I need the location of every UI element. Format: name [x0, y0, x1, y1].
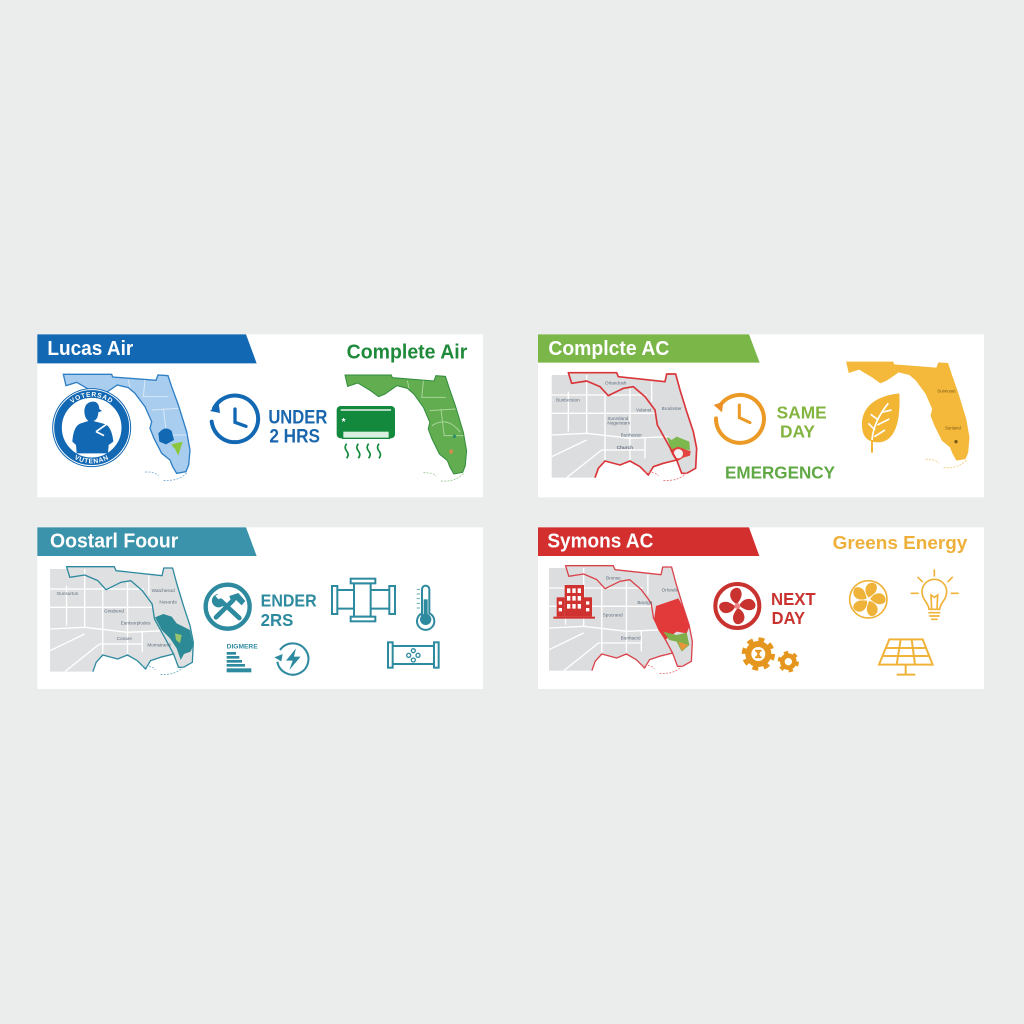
map: gray street map with red region: Bronse — [606, 575, 621, 580]
text: same day: DAY — [780, 422, 815, 442]
icon: stacked bars with caption — [227, 644, 258, 672]
map: gray street map with red outline: Orlandosh — [605, 380, 627, 385]
icon: wrench and hammer — [206, 585, 250, 629]
text: ender 2rs: 2RS — [261, 610, 293, 630]
map: gray street map with teal outline: Eantsorplodes — [121, 620, 151, 625]
map: gray street map with red outline: Bunberston — [556, 398, 580, 403]
text: ender 2rs: ENDER — [261, 591, 317, 611]
map: Florida yellow: Sunnoset — [937, 388, 956, 393]
map: gray street map with red outline: Church — [617, 445, 633, 450]
header banner: Symons AC: Symons AC — [547, 531, 653, 553]
icon: orange clock — [714, 395, 764, 443]
icon: leaf — [862, 393, 900, 453]
text: next day: NEXT — [771, 589, 816, 609]
panel: Complete AC — [538, 334, 984, 497]
icon: pipe fitting — [332, 579, 395, 621]
map: gray street map with teal outline: Watchesod — [152, 588, 175, 593]
icon: stacked bars with caption: DIGMERE — [227, 644, 258, 650]
icon: veteran badge: VOTERSAD — [70, 392, 112, 402]
panel: Symons AC — [538, 527, 984, 689]
icon: thermometer — [417, 586, 434, 630]
map: gray street map with red region: Bunhacrd — [621, 635, 641, 640]
map: gray street map with teal outline: Ginsbend — [104, 608, 124, 613]
map: gray street map with teal outline: Conare — [117, 636, 132, 641]
icon: building — [553, 585, 595, 619]
label: Complete Air: Complete Air — [347, 341, 468, 363]
icon: energy circle — [274, 643, 308, 675]
map: gray street map with red region: Orlonds — [662, 587, 679, 592]
text: emergency: EMERGENCY — [725, 462, 835, 482]
header banner: Oostarl Foour: Oostarl Foour — [50, 531, 179, 553]
icon: light bulb — [911, 570, 958, 619]
map: gray street map with red outline — [552, 373, 697, 480]
map: Florida light blue — [63, 374, 190, 480]
icon: gears — [744, 640, 797, 670]
map: gray street map with red region — [549, 566, 692, 673]
map: gray street map with red outline: Sunrsland — [607, 416, 629, 421]
header banner: Symons AC — [538, 527, 759, 556]
text: next day — [771, 589, 816, 628]
map: gray street map with teal outline — [50, 567, 193, 674]
header banner: Lucas Air — [37, 334, 257, 363]
icon: air conditioner — [337, 406, 395, 458]
map: Florida green — [345, 375, 467, 481]
text: response time: UNDER — [268, 407, 327, 428]
header banner: Complete AC: Complcte AC — [548, 338, 669, 360]
map: gray street map with red outline: Nogerstam — [607, 420, 630, 425]
map: gray street map with red outline: Brodnster — [662, 406, 682, 411]
icon: air conditioner: * — [342, 417, 346, 428]
icon: red fan — [715, 584, 759, 628]
map: gray street map with teal outline: Ounsurton — [57, 591, 79, 596]
icon: clock — [210, 396, 258, 442]
icon: inline valve — [388, 642, 439, 668]
icon: solar panel — [879, 639, 933, 675]
icon: veteran badge: VUTENAN — [76, 454, 108, 464]
map: gray street map with red outline: Volanst — [636, 408, 652, 413]
map: gray street map with teal outline: Nosorde — [159, 599, 177, 604]
text: response time: 2 HRS — [269, 426, 320, 447]
icon: orange fan — [850, 581, 887, 618]
text: next day: DAY — [772, 608, 805, 628]
map: gray street map with teal outline: Momstrand — [147, 643, 171, 648]
map: Florida yellow: Sunland — [945, 426, 961, 431]
panel: Oostarl Foour — [37, 527, 483, 689]
map: gray street map with red region: Bourge — [637, 600, 653, 605]
text: same day — [777, 402, 827, 442]
header banner: Oostarl Foour — [37, 527, 257, 556]
header banner: Complete AC — [538, 334, 760, 363]
panel: Lucas Air — [37, 334, 483, 498]
text: same day: SAME — [777, 402, 827, 422]
map: gray street map with red outline: Bunhestor — [621, 433, 642, 438]
icon: veteran badge — [52, 388, 132, 468]
map: Florida yellow — [846, 362, 970, 468]
text: response time — [268, 407, 327, 447]
label: Greens Energy: Greens Energy — [833, 532, 968, 553]
map: gray street map with red region: Spocrand — [603, 613, 623, 618]
text: ender 2rs — [261, 591, 317, 630]
header banner: Lucas Air: Lucas Air — [47, 338, 134, 360]
